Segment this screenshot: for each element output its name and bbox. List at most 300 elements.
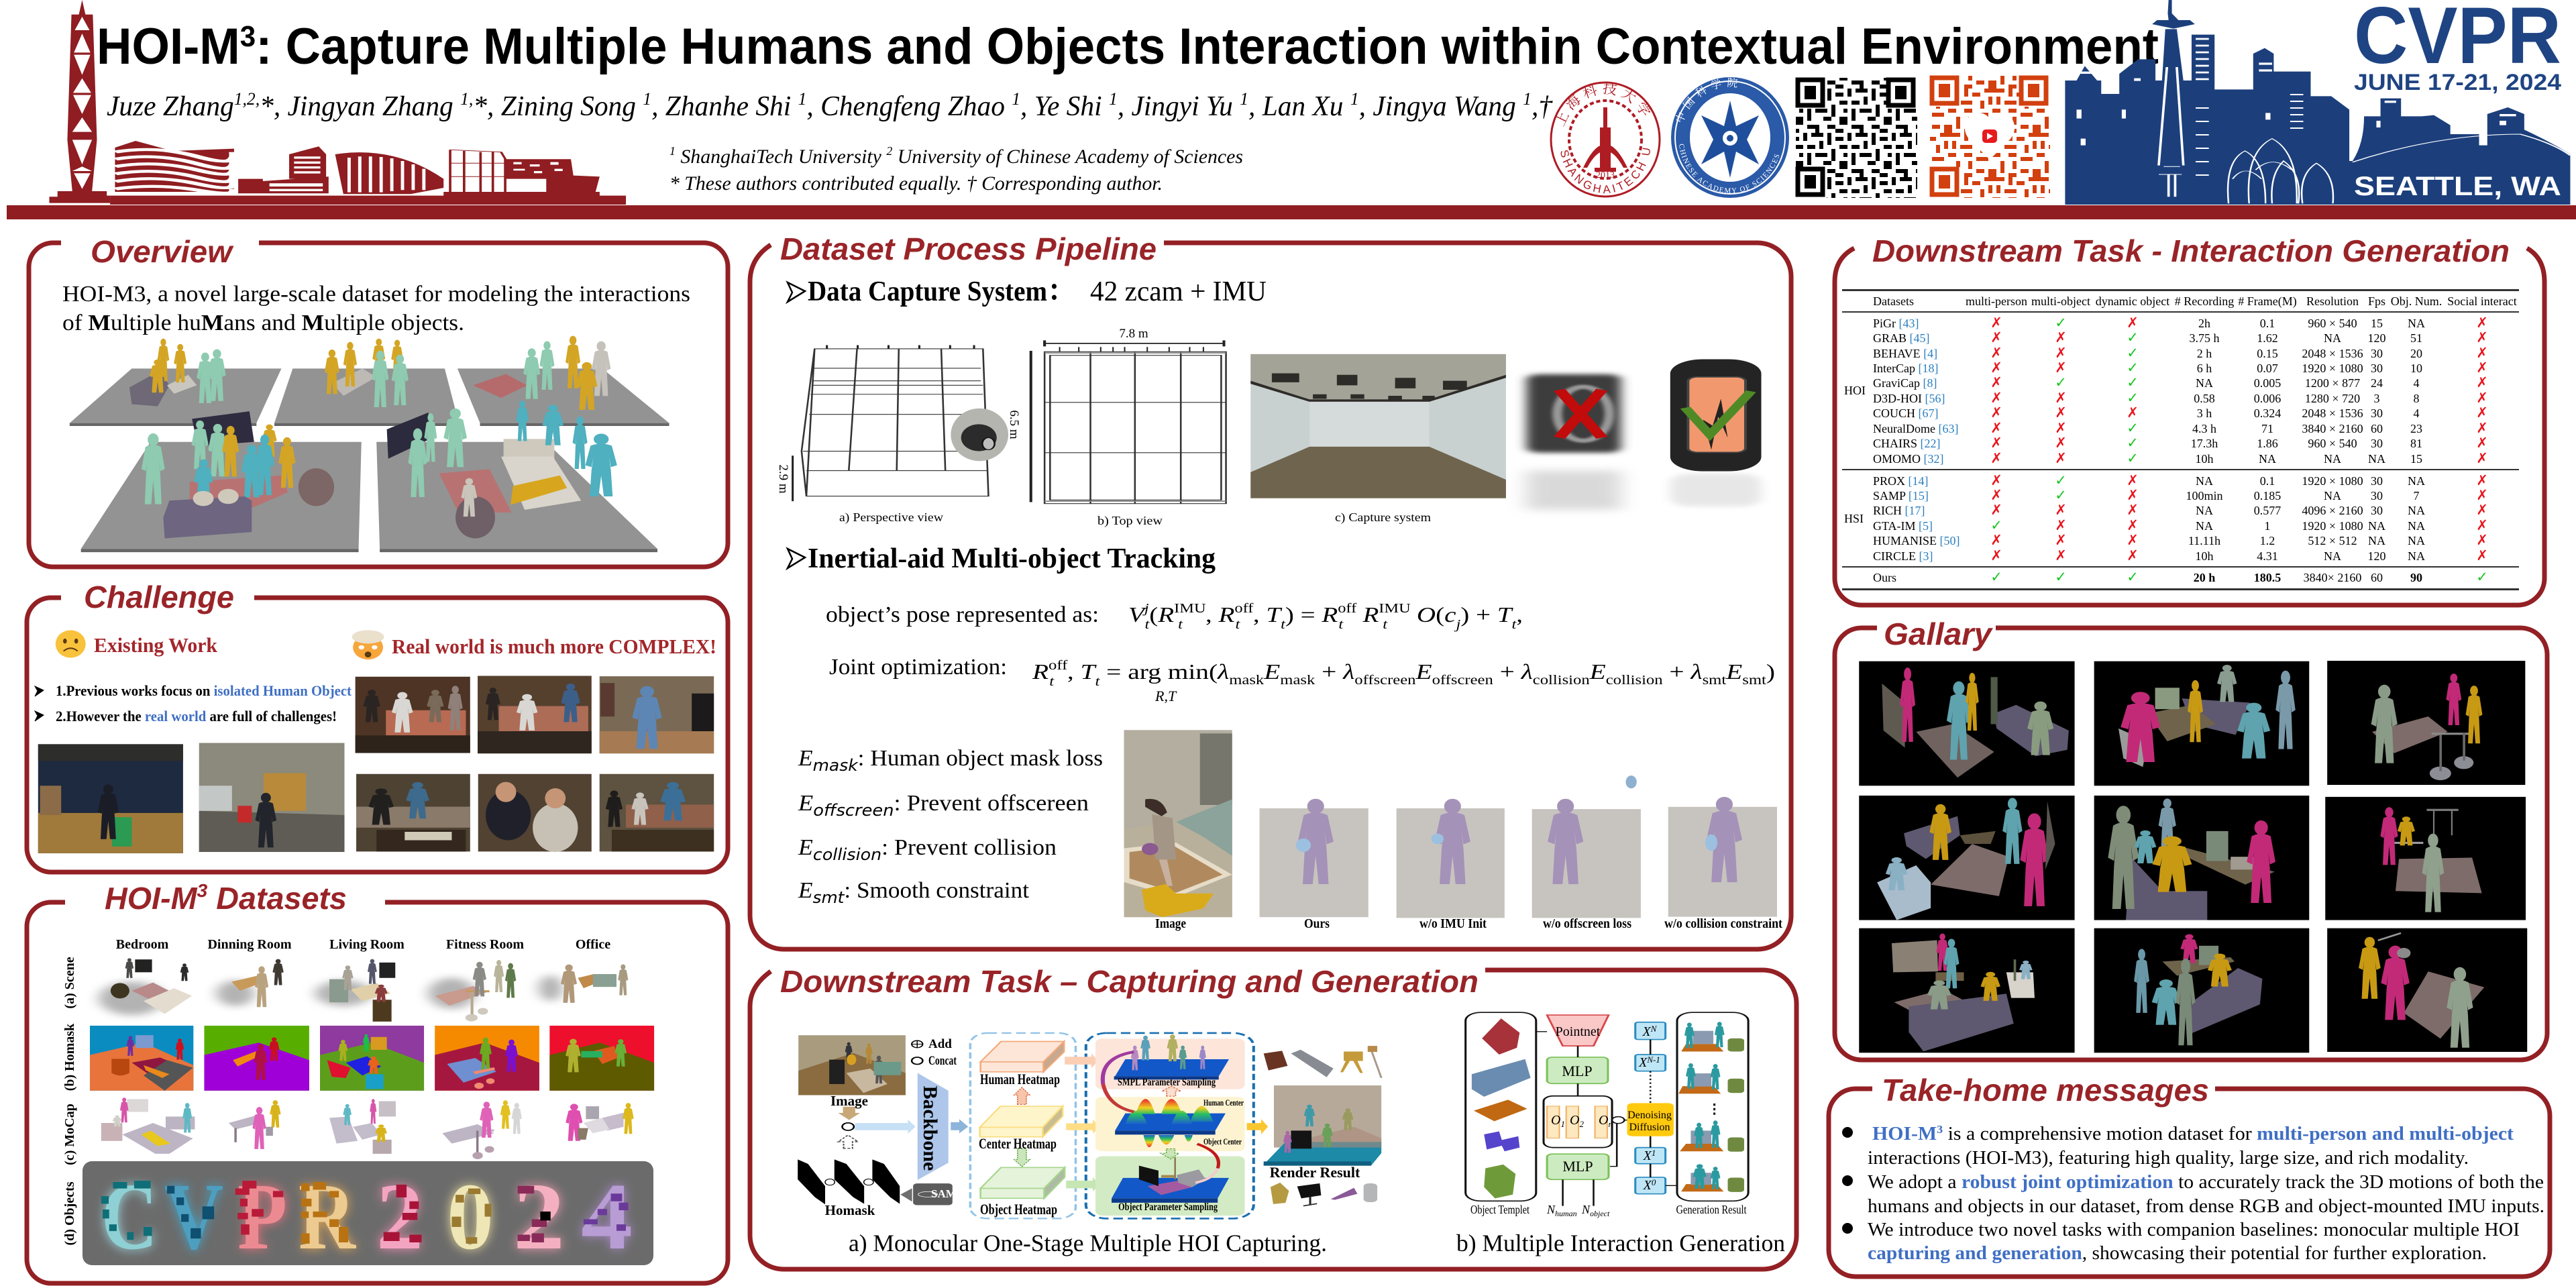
row: mocap	[101, 1097, 634, 1159]
dataset comparison table: 7	[2414, 489, 2419, 502]
loss definitions: E	[798, 835, 813, 860]
dataset comparison table: 3	[2373, 392, 2380, 405]
labels: render result: Render Result	[1270, 1164, 1360, 1181]
equation: joint optimization: mask	[1280, 673, 1315, 688]
dataset comparison table: COUCH [67]	[1873, 407, 1939, 420]
dataset comparison table: HOI	[1844, 384, 1866, 397]
dataset comparison table: SAMP [15]	[1873, 489, 1929, 502]
dataset comparison table: 512 × 512	[2308, 534, 2357, 547]
result panels: tracking comparison	[1260, 775, 1777, 918]
labels: generation diagram: N	[1547, 1203, 1555, 1216]
dataset comparison table: ✗	[2476, 405, 2488, 421]
dataset comparison table: ✗	[2055, 450, 2067, 466]
dataset comparison table: 51	[2410, 331, 2422, 345]
labels: capturing inputs: Homask	[825, 1202, 875, 1218]
dataset comparison table: ✗	[2055, 405, 2067, 421]
dataset comparison table: 10	[2410, 362, 2422, 375]
icon: QR code video	[1930, 76, 2050, 198]
dataset comparison table: 4096 × 2160	[2302, 504, 2363, 517]
panel: gallery	[1835, 616, 2547, 1060]
equation: object pose: ,	[1205, 602, 1219, 627]
labels: generation diagram: 2	[1579, 1119, 1584, 1129]
gallery renders grid	[1859, 661, 2527, 1053]
labels: generation diagram: Object Templet	[1470, 1203, 1529, 1216]
authors: , Jingyi Yu	[1118, 91, 1240, 122]
loss definitions: smt	[813, 888, 845, 907]
sub-heading: data capture system: Data Capture System：	[808, 276, 1073, 307]
icon: sad face emoji	[56, 630, 86, 658]
icon: ShanghaiTech University seal: 上海科技大学	[1556, 82, 1650, 127]
loss definitions: collision	[813, 845, 881, 864]
equation: joint optimization: +	[1663, 659, 1691, 684]
diagram: capture rig top view	[1031, 340, 1226, 504]
CVPR conference logo text	[2354, 0, 2561, 201]
dataset comparison table: 1920 × 1080	[2302, 519, 2363, 533]
heading: challenge: Challenge	[84, 580, 234, 614]
dataset comparison table: 24	[2371, 376, 2383, 390]
dataset comparison table: 2 h	[2197, 347, 2212, 360]
affiliations: 1	[669, 144, 676, 158]
icon: Chinese Academy of Sciences seal: CHINESE ACADEMY OF SCIENCES	[1679, 144, 1779, 193]
dataset comparison table: ✗	[2055, 345, 2067, 361]
photos: challenge scenes	[38, 670, 714, 856]
take-home text: humans and objects in our dataset, from dense RGB and object-mounted IMU inputs.	[1868, 1196, 2544, 1217]
dataset comparison table: 2h	[2198, 317, 2210, 330]
dataset comparison table: ✗	[2476, 472, 2488, 488]
row labels: (c) MoCap	[62, 1104, 77, 1165]
equation: object pose: IMU	[1379, 601, 1411, 616]
dataset comparison table: RICH [17]	[1873, 504, 1925, 517]
equation: joint optimization: )	[1766, 659, 1775, 684]
dataset comparison table: 960 × 540	[2308, 317, 2357, 330]
dataset comparison table: multi-object	[2031, 294, 2090, 308]
objects CVPR 2024 glowing letters: 2	[376, 1163, 423, 1269]
dataset comparison table: 180.5	[2254, 571, 2281, 584]
dataset comparison table: Resolution	[2306, 294, 2359, 308]
equation: object pose: t	[1178, 617, 1183, 632]
dataset comparison table: 30	[2371, 347, 2383, 360]
labels: comparison captions: Image	[1155, 916, 1186, 931]
labels: generation diagram: 0	[1652, 1177, 1656, 1187]
labels: generation diagram: O	[1570, 1113, 1579, 1128]
column labels: Bedroom	[116, 937, 169, 952]
authors: *, Jingyan Zhang	[260, 91, 460, 122]
authors: , Chengfeng Zhao	[806, 91, 1012, 122]
dataset comparison table: 0.15	[2257, 347, 2278, 360]
equation: object pose: IMU	[1174, 601, 1206, 616]
dataset comparison table: ✗	[1990, 487, 2002, 503]
authors: , Zhanhe Shi	[651, 91, 798, 122]
dataset comparison table: 100min	[2186, 489, 2223, 502]
dataset comparison table: ✗	[2055, 502, 2067, 518]
icon: exploding head emoji	[352, 630, 384, 659]
dataset comparison table: ✗	[1990, 472, 2002, 488]
loss definitions: E	[798, 746, 813, 771]
column labels: Dinning Room	[207, 937, 292, 952]
dataset comparison table: 30	[2371, 504, 2383, 517]
dataset comparison table: ✗	[2127, 487, 2139, 503]
dataset comparison table: ✗	[2476, 420, 2488, 436]
dataset comparison table: 3840 × 2160	[2302, 422, 2363, 435]
labels: comparison captions	[1155, 916, 1782, 931]
dataset comparison table: 30	[2371, 362, 2383, 375]
equation: object pose: t	[1511, 617, 1517, 632]
equation: joint optimization: Joint optimization:	[829, 655, 1007, 680]
equation: object pose: t	[1338, 617, 1344, 632]
icon: IMU device with green check	[1670, 360, 1761, 506]
dataset comparison table: ✗	[2127, 472, 2139, 488]
dataset comparison table: 1920 × 1080	[2302, 474, 2363, 488]
dataset comparison table: 3 h	[2197, 407, 2212, 420]
icon: Seattle skyline	[2065, 0, 2570, 205]
caption: monocular capturing: a) Monocular One-Stage Multiple HOI Capturing.	[849, 1230, 1327, 1256]
dataset comparison table: NA	[2368, 519, 2385, 533]
labels: capturing inputs: Backbone	[919, 1086, 941, 1171]
icon: blurred camera with red cross	[1527, 374, 1621, 510]
equation: object pose: R	[1218, 602, 1235, 627]
render result and object thumbnails	[1264, 1046, 1381, 1206]
photo: tracking input image	[1124, 730, 1232, 917]
dataset comparison table: 8	[2414, 392, 2419, 405]
dataset comparison table: 15	[2410, 452, 2422, 466]
title: : Capture Multiple Humans and Objects Interaction within Contextual Environment	[256, 18, 2159, 75]
dataset comparison table: ✗	[1990, 329, 2002, 345]
dataset comparison table: ✗	[1990, 345, 2002, 361]
dataset comparison table: ✗	[1990, 390, 2002, 406]
dataset comparison table: 4.31	[2257, 549, 2278, 563]
equation: object pose: t	[1383, 617, 1388, 632]
equation: joint optimization: R,T	[1155, 688, 1177, 704]
dataset comparison table: NA	[2368, 452, 2385, 466]
dataset comparison table	[1842, 289, 2519, 590]
labels: heatmaps: Object Parameter Sampling	[1118, 1201, 1218, 1213]
authors: , Lan Xu	[1248, 91, 1350, 122]
dataset comparison table: 0.005	[2254, 376, 2281, 390]
panel: take-home messages	[1829, 1073, 2550, 1277]
equation: object pose: t	[1236, 617, 1240, 632]
dataset comparison table: NA	[2196, 474, 2213, 488]
icon: Chinese Academy of Sciences seal	[1671, 77, 1789, 198]
labels: generation diagram: object	[1590, 1209, 1610, 1218]
header banner bar	[7, 205, 2576, 219]
dataset comparison table: D3D-HOI [56]	[1873, 392, 1945, 405]
dataset comparison table: 1.2	[2260, 534, 2275, 547]
authors: , Ye Shi	[1020, 91, 1109, 122]
dataset comparison table: 17.3h	[2191, 437, 2218, 450]
equation: joint optimization: ,	[1067, 659, 1081, 684]
dataset comparison table: InterCap [18]	[1873, 362, 1938, 375]
dataset comparison table: GRAB [45]	[1873, 331, 1930, 345]
sub-heading: data capture system	[788, 276, 1267, 307]
take-home text: HOI-M	[1872, 1124, 1937, 1144]
dataset comparison table: ✗	[2476, 345, 2488, 361]
dataset comparison table: Obj. Num.	[2391, 294, 2442, 308]
heading: pipeline: Dataset Process Pipeline	[780, 231, 1157, 266]
dataset comparison table: ✗	[1990, 374, 2002, 390]
equation: joint optimization: off	[1049, 658, 1068, 673]
dataset comparison table: NeuralDome [63]	[1873, 422, 1958, 435]
dataset comparison table: ✓	[2055, 487, 2067, 503]
equation: joint optimization: smt	[1742, 673, 1766, 688]
equation: joint optimization: T	[1081, 659, 1097, 684]
equation: object pose: off	[1234, 601, 1254, 616]
equation: object pose: j	[1142, 601, 1149, 616]
objects CVPR 2024 glowing letters: 0	[447, 1163, 494, 1269]
labels: generation diagram: N	[1650, 1024, 1658, 1034]
take-home text: We introduce two novel tasks with companion baselines: monocular multiple HOI	[1868, 1220, 2520, 1240]
dataset comparison table: NA	[2408, 534, 2425, 547]
equation: joint optimization: collision	[1533, 673, 1590, 688]
heading: datasets: 3	[197, 880, 208, 901]
dataset comparison table: 60	[2371, 422, 2383, 435]
dataset comparison table: 120	[2368, 331, 2385, 345]
labels: generation diagram: O	[1551, 1113, 1560, 1128]
icon: ShanghaiTech University seal	[1550, 82, 1661, 197]
dataset comparison table: HSI	[1844, 512, 1864, 525]
dataset comparison table: 2048 × 1536	[2302, 347, 2363, 360]
labels: generation diagram: MLP	[1562, 1158, 1593, 1175]
sub-heading: inertial-aid tracking: Inertial-aid Multi-object Tracking	[808, 543, 1216, 574]
diagram: multiple interaction generation	[1466, 1012, 1748, 1218]
icon: campus skyline illustration	[110, 141, 626, 205]
labels: comparison captions: w/o IMU Init	[1419, 916, 1487, 931]
labels: comparison captions: w/o offscreen loss	[1543, 916, 1631, 931]
equation: joint optimization: mask	[1229, 673, 1264, 688]
panel: downstream task interaction generation	[1835, 233, 2544, 605]
dataset comparison table: OMOMO [32]	[1873, 452, 1944, 466]
dataset comparison table: ✗	[2476, 487, 2488, 503]
dataset comparison table: ✗	[2476, 390, 2488, 406]
dataset comparison table: 30	[2371, 474, 2383, 488]
dataset comparison table: 120	[2368, 549, 2385, 563]
dataset comparison table: ✗	[2476, 435, 2488, 451]
labels: generation diagram: MLP	[1562, 1063, 1593, 1079]
labels: capture rig dimensions: a) Perspective view	[839, 511, 943, 525]
row: homask	[90, 1026, 654, 1091]
dataset comparison table: 1200 × 877	[2305, 376, 2360, 390]
equation: joint optimization: +	[1315, 659, 1343, 684]
dataset comparison table: PiGr [43]	[1873, 317, 1919, 330]
dataset comparison table: NA	[2324, 331, 2341, 345]
CVPR conference logo text: JUNE 17-21, 2024	[2354, 70, 2561, 95]
dataset comparison table: 0.1	[2260, 474, 2275, 488]
equation: object pose: ) +	[1460, 602, 1497, 627]
dataset comparison table: ✓	[2127, 569, 2139, 585]
column labels: Office	[576, 937, 610, 952]
overview text	[62, 282, 690, 335]
dataset comparison table: ✓	[2127, 435, 2139, 451]
authors: 1,2,	[234, 89, 260, 109]
dataset comparison table: NA	[2408, 474, 2425, 488]
dataset comparison table: 81	[2410, 437, 2422, 450]
equation: object pose: T	[1266, 602, 1283, 627]
labels: capturing inputs: Concat	[928, 1054, 957, 1068]
dataset comparison table: 0.58	[2194, 392, 2215, 405]
equation: object pose: t	[1145, 617, 1150, 632]
labels: heatmaps: Object Heatmap	[980, 1201, 1057, 1218]
diagram: capture rig perspective view	[793, 345, 1008, 501]
dataset comparison table: 4.3 h	[2192, 422, 2216, 435]
dataset comparison table: 1920 × 1080	[2302, 362, 2363, 375]
labels: heatmaps: SMPL Parameter Sampling	[1118, 1077, 1216, 1088]
authors: 1	[643, 89, 651, 109]
labels: capturing inputs: Image	[830, 1093, 868, 1109]
labels: capturing inputs	[825, 1037, 957, 1218]
scenes: multi-person floors	[70, 336, 669, 552]
labels: generation diagram: X	[1643, 1024, 1651, 1039]
dataset comparison table: ✗	[2055, 390, 2067, 406]
authors: 1	[798, 89, 806, 109]
objects CVPR 2024 glowing letters: C	[101, 1163, 158, 1269]
labels: heatmaps	[979, 1071, 1244, 1218]
dataset comparison table: 960 × 540	[2308, 437, 2357, 450]
authors: , Jingya Wang	[1359, 91, 1523, 122]
dataset comparison table: Ours	[1873, 571, 1896, 584]
take-home text	[1868, 1123, 2544, 1264]
objects CVPR 2024 glowing letters: R	[299, 1163, 356, 1269]
dataset comparison table: PROX [14]	[1873, 474, 1929, 488]
dataset comparison table: NA	[2368, 534, 2385, 547]
heading: interaction generation: Downstream Task - Interaction Generation	[1872, 233, 2510, 268]
dataset comparison table: ✗	[1990, 405, 2002, 421]
labels: generation diagram	[1470, 1024, 1747, 1218]
dataset comparison table: ✗	[2476, 532, 2488, 548]
take-home text: interactions (HOI-M3), featuring high quality, large size, and rich modality.	[1868, 1148, 2469, 1169]
equation: joint optimization: λ	[1342, 659, 1354, 684]
dataset comparison table: # Frame(M)	[2238, 294, 2297, 309]
dataset comparison table: ✗	[2476, 374, 2488, 390]
dataset comparison table: ✗	[1990, 435, 2002, 451]
dataset comparison table: ✗	[1990, 420, 2002, 436]
overview text: of Multiple huMans and Multiple objects.	[62, 311, 464, 335]
column labels: Living Room	[329, 937, 405, 952]
dataset comparison table: ✓	[2127, 345, 2139, 361]
authors: 1	[1523, 89, 1532, 109]
loss definitions: : Smooth constraint	[844, 878, 1030, 903]
dataset comparison table: ✗	[2476, 360, 2488, 376]
labels: generation diagram: X	[1639, 1055, 1647, 1070]
equation: object pose: R	[1321, 602, 1338, 627]
dataset comparison table: ✗	[2127, 547, 2139, 564]
icon: QR code project page	[1796, 78, 1917, 198]
equation: joint optimization: E	[1725, 659, 1743, 684]
caption: interaction generation: b) Multiple Interaction Generation	[1456, 1230, 1785, 1256]
sub-heading: real world: Real world is much more COMPLEX!	[392, 635, 716, 658]
labels: generation diagram: N-1	[1646, 1055, 1660, 1065]
heading: datasets: Datasets	[207, 881, 347, 916]
loss definitions: mask	[813, 756, 859, 775]
panel: dataset process pipeline	[750, 231, 1791, 949]
take-home text: We adopt a robust joint optimization to accurately track the 3D motions of both the	[1868, 1172, 2544, 1193]
objects CVPR 2024 glowing letters: 4	[581, 1163, 633, 1269]
bullet list: 1.Previous works focus on isolated Human Object	[56, 682, 352, 699]
dataset comparison table: NA	[2408, 317, 2425, 330]
dataset comparison table: 4	[2414, 407, 2419, 420]
dataset comparison table: 30	[2371, 407, 2383, 420]
dataset comparison table: NA	[2196, 376, 2213, 390]
authors: 1	[1350, 89, 1359, 109]
dataset comparison table: ✗	[1990, 502, 2002, 518]
dataset comparison table: 0.577	[2254, 504, 2281, 517]
dataset comparison table: 6 h	[2197, 362, 2212, 375]
dataset comparison table: 3.75 h	[2190, 331, 2219, 345]
dataset comparison table: 0.324	[2254, 407, 2281, 420]
dataset comparison table: ✗	[2476, 517, 2488, 533]
sub-heading: existing work: Existing Work	[94, 633, 218, 657]
dataset comparison table: ✗	[2127, 502, 2139, 518]
objects CVPR 2024 glowing letters: 0	[447, 1163, 494, 1269]
equation: object pose: ,	[1253, 602, 1266, 627]
labels: generation diagram: n	[1608, 1119, 1613, 1129]
dataset comparison table: 15	[2371, 317, 2383, 330]
dataset comparison table: ✓	[2127, 374, 2139, 390]
labels: generation diagram: O	[1599, 1113, 1608, 1128]
labels: generation diagram: human	[1555, 1209, 1577, 1218]
authors: ,†	[1532, 91, 1553, 122]
authors: 1	[1012, 89, 1020, 109]
equation: joint optimization: +	[1493, 659, 1521, 684]
affiliations: * These authors contributed equally. † Corresponding author.	[669, 172, 1163, 195]
dataset comparison table: ✗	[2127, 405, 2139, 421]
labels: capture rig dimensions: 6.5 m	[1007, 410, 1021, 439]
equation: joint optimization: collision	[1606, 673, 1663, 688]
dataset comparison table: 0.006	[2254, 392, 2281, 405]
equation: object pose: ,	[1516, 602, 1523, 627]
heading: overview: Overview	[91, 234, 234, 269]
labels: capturing inputs: Add	[928, 1037, 952, 1051]
dataset comparison table: 30	[2371, 489, 2383, 502]
labels: generation diagram: 1	[1652, 1148, 1656, 1158]
row: scene photos	[99, 958, 628, 1022]
dataset comparison table: 0.07	[2257, 362, 2278, 375]
equation: object pose	[826, 601, 1523, 632]
authors: 1	[1240, 89, 1248, 109]
dataset comparison table: HUMANISE [50]	[1873, 534, 1960, 547]
dataset comparison table: BEHAVE [4]	[1873, 347, 1937, 360]
dataset comparison table: 1	[2265, 519, 2270, 533]
dataset comparison table: ✓	[2127, 450, 2139, 466]
dataset comparison table: 23	[2410, 422, 2422, 435]
dataset comparison table: 4	[2414, 376, 2419, 390]
dataset comparison table: ✗	[2055, 360, 2067, 376]
icon: Chinese Academy of Sciences seal: 中国科学院	[1676, 78, 1737, 122]
labels: generation diagram: N	[1582, 1203, 1590, 1216]
dataset comparison table: ✓	[1990, 517, 2002, 533]
dataset comparison table: ✓	[2055, 315, 2067, 331]
equation: joint optimization: E	[1589, 659, 1606, 684]
dataset comparison table: ✗	[2127, 315, 2139, 331]
dataset comparison table: ✗	[2127, 517, 2139, 533]
authors: Juze Zhang	[107, 91, 236, 122]
dataset comparison table: 3840× 2160	[2304, 571, 2361, 584]
dataset comparison table: ✓	[2055, 472, 2067, 488]
affiliations: University of Chinese Academy of Sciences	[892, 146, 1243, 168]
dataset comparison table: ✓	[2055, 374, 2067, 390]
equation: object pose: ) =	[1285, 602, 1322, 627]
dataset comparison table: NA	[2324, 452, 2341, 466]
labels: generation diagram: Denoising	[1627, 1110, 1672, 1121]
panel: datasets	[27, 880, 728, 1283]
labels: heatmaps: Human Center	[1203, 1097, 1244, 1108]
dataset comparison table: NA	[2408, 504, 2425, 517]
dataset comparison table: 30	[2371, 437, 2383, 450]
bullet markers	[1842, 1127, 1853, 1234]
affiliations: 2	[886, 144, 892, 158]
dataset comparison table: 10h	[2195, 549, 2214, 563]
dataset comparison table: NA	[2196, 504, 2213, 517]
labels: generation diagram: X	[1644, 1178, 1652, 1193]
labels: generation diagram: Diffusion	[1629, 1122, 1670, 1133]
